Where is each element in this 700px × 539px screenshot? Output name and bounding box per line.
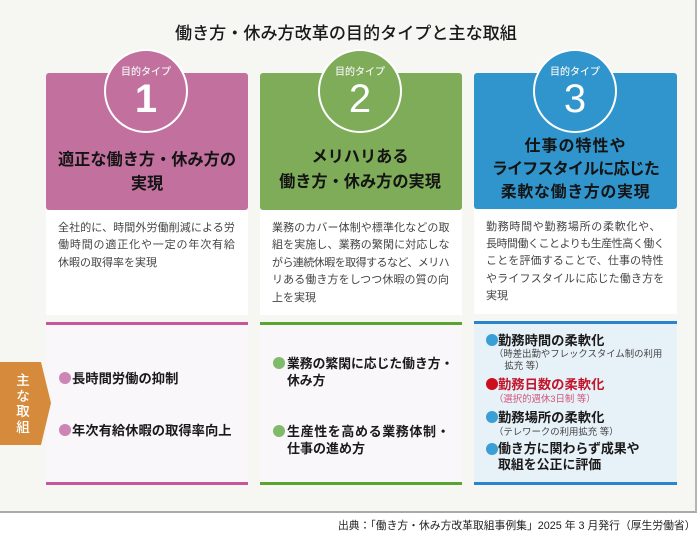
item: fair evaluation: [498, 441, 640, 472]
type 2 description text: 組を実施し、業務の繁閑に対応しな: [272, 239, 450, 251]
type 2 description text: リある働き方をしつつ休暇の質の向: [272, 274, 449, 286]
bullet: working days: [486, 378, 498, 390]
side tab label: 主な取組: [16, 373, 30, 435]
badge: type 3: 目的タイプ: [550, 67, 600, 78]
type 2 description: [260, 210, 462, 315]
item: fair evaluation: 働き方に関わらず成果や: [498, 441, 640, 456]
type 1 description text: 全社的に、時間外労働削減による労: [58, 222, 235, 234]
note: working hours: （時差出勤やフレックスタイム制の利用: [494, 348, 662, 359]
type 3 description text: 勤務時間や勤務場所の柔軟化や、: [486, 220, 661, 232]
panel: type 3: [474, 73, 677, 485]
type 1 heading text: 適正な働き方・休み方の: [58, 151, 236, 169]
bullet: working hours: [486, 334, 498, 346]
source note: 出典：「働き方・休み方改革取組事例集」2025 年 3 月発行（厚生労働省）: [338, 520, 696, 532]
type 1 heading block: [46, 73, 248, 210]
bullet: workplace: [486, 411, 498, 423]
badge: type 2: 2: [349, 77, 371, 121]
type 1 description: [46, 210, 248, 315]
type 1 heading text: [58, 150, 236, 193]
type 2 heading block: [260, 73, 462, 210]
note: workplace: （テレワークの利用拡充 等）: [494, 426, 618, 437]
badge: type 2: 目的タイプ: [335, 67, 385, 78]
item: workload: 休み方: [287, 372, 325, 388]
item: paid leave: 年次有給休暇の取得率向上: [72, 422, 232, 438]
type 2 description text: 業務のカバー体制や標準化などの取: [272, 222, 450, 234]
bullet: paid leave: [59, 424, 71, 436]
type 2 description text: がら連続休暇を取得するなど、メリハ: [272, 257, 449, 269]
type 3 description text: [486, 220, 664, 302]
type 1 heading text: 実現: [131, 175, 163, 193]
type 1 description text: 休暇の取得率を実現: [58, 257, 157, 269]
badge: type 2: [318, 49, 402, 133]
bullet: long hours: [59, 372, 71, 384]
item: workload: 業務の繁閑に応じた働き方・: [287, 356, 453, 370]
bullet: fair evaluation: [486, 443, 498, 455]
note: working hours: [494, 348, 662, 371]
item: working days: 勤務日数の柔軟化: [498, 376, 604, 392]
type 2 description text: [272, 222, 450, 304]
type 3 description text: ことを評価することで、仕事の特性: [486, 255, 664, 267]
badge: type 1: [104, 49, 188, 133]
item: productivity: 仕事の進め方: [287, 440, 365, 456]
type 3 heading block: [474, 73, 677, 209]
type 3 description text: 実現: [486, 290, 508, 302]
side tab: main initiatives: [0, 362, 51, 445]
badge: type 3: [533, 49, 617, 133]
item: workload: [287, 356, 453, 388]
item: long hours: 長時間労働の抑制: [72, 370, 178, 386]
type 3 description text: やライフスタイルに応じた働き方を: [486, 273, 664, 285]
panel: type 1: [46, 73, 248, 485]
bullet: productivity: [273, 425, 285, 437]
type 3 initiatives area: [474, 321, 677, 485]
title: 働き方・休み方改革の目的タイプと主な取組: [175, 24, 517, 43]
type 2 heading text: 働き方・休み方の実現: [279, 173, 441, 191]
type 3 heading text: [492, 137, 659, 201]
type 3 description text: 長時間働くことよりも生産性高く働く: [486, 238, 664, 250]
item: fair evaluation: 取組を公正に評価: [498, 457, 601, 472]
type 2 initiatives area: [260, 322, 462, 485]
badge: type 1: 目的タイプ: [121, 67, 171, 78]
badge: type 1: 1: [135, 77, 157, 121]
type 3 description: [474, 209, 677, 314]
type 3 heading text: ライフスタイルに応じた: [492, 161, 659, 178]
type 3 heading text: 仕事の特性や: [524, 138, 626, 155]
type 3 heading text: 柔軟な働き方の実現: [501, 184, 650, 201]
panel: type 2: [260, 73, 462, 485]
type 2 description text: 上を実現: [272, 292, 316, 304]
item: productivity: 生産性を高める業務体制・: [287, 424, 450, 438]
item: productivity: [287, 424, 450, 456]
badge: type 3: 3: [564, 77, 586, 121]
note: working days: （選択的週休3日制 等）: [494, 393, 596, 404]
type 2 heading text: メリハリある: [311, 148, 409, 166]
type 1 description text: 働時間の適正化や一定の年次有給: [58, 239, 236, 251]
note: working hours: 拡充 等）: [504, 360, 545, 371]
bullet: workload: [273, 357, 285, 369]
item: working hours: 勤務時間の柔軟化: [498, 332, 604, 348]
type 2 heading text: [279, 148, 441, 191]
item: workplace: 勤務場所の柔軟化: [498, 410, 604, 424]
type 1 initiatives area: [46, 322, 248, 485]
type 1 description text: [58, 222, 236, 269]
